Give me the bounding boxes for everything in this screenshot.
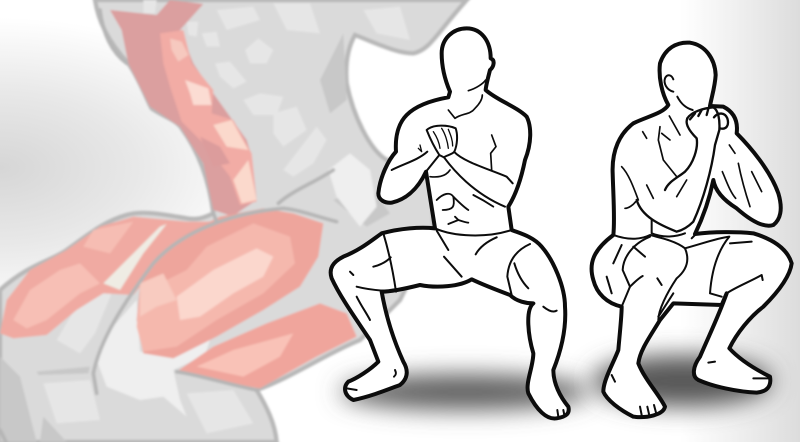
right forearm bbox=[444, 152, 513, 207]
red muscles: calf bbox=[177, 303, 357, 388]
clasped hands and forearms bbox=[392, 126, 513, 207]
front arm and fist bbox=[637, 107, 728, 232]
body outline bbox=[331, 28, 569, 419]
light highlight: hip and knee bbox=[97, 153, 377, 417]
figure: side view squat bbox=[592, 43, 792, 417]
gray contour strokes bbox=[0, 10, 337, 442]
ear and jaw lines bbox=[665, 75, 693, 110]
chest and arm muscle lines bbox=[622, 116, 762, 208]
abdominal lines bbox=[437, 194, 493, 224]
blurred muscular body illustration bbox=[0, 0, 467, 442]
gray muscle patches bbox=[43, 0, 410, 433]
floor shadow: side view figure bbox=[592, 355, 772, 407]
red muscles: right thigh bbox=[137, 208, 323, 358]
shorts and leg lines bbox=[607, 220, 768, 415]
red muscles: upper back column bbox=[110, 0, 257, 217]
left forearm bbox=[392, 152, 427, 170]
fingers bbox=[433, 128, 453, 148]
left wrist edge bbox=[426, 155, 439, 172]
floor shadow: front view figure bbox=[340, 374, 590, 410]
face and chest lines bbox=[430, 80, 496, 177]
hands bbox=[427, 126, 457, 157]
red muscles: left thigh bbox=[0, 217, 217, 338]
figure: front view squat bbox=[331, 28, 569, 419]
body outline bbox=[592, 43, 792, 417]
shorts and leg lines bbox=[347, 228, 564, 417]
body silhouette bbox=[0, 0, 467, 442]
wrist crease bbox=[418, 145, 422, 152]
